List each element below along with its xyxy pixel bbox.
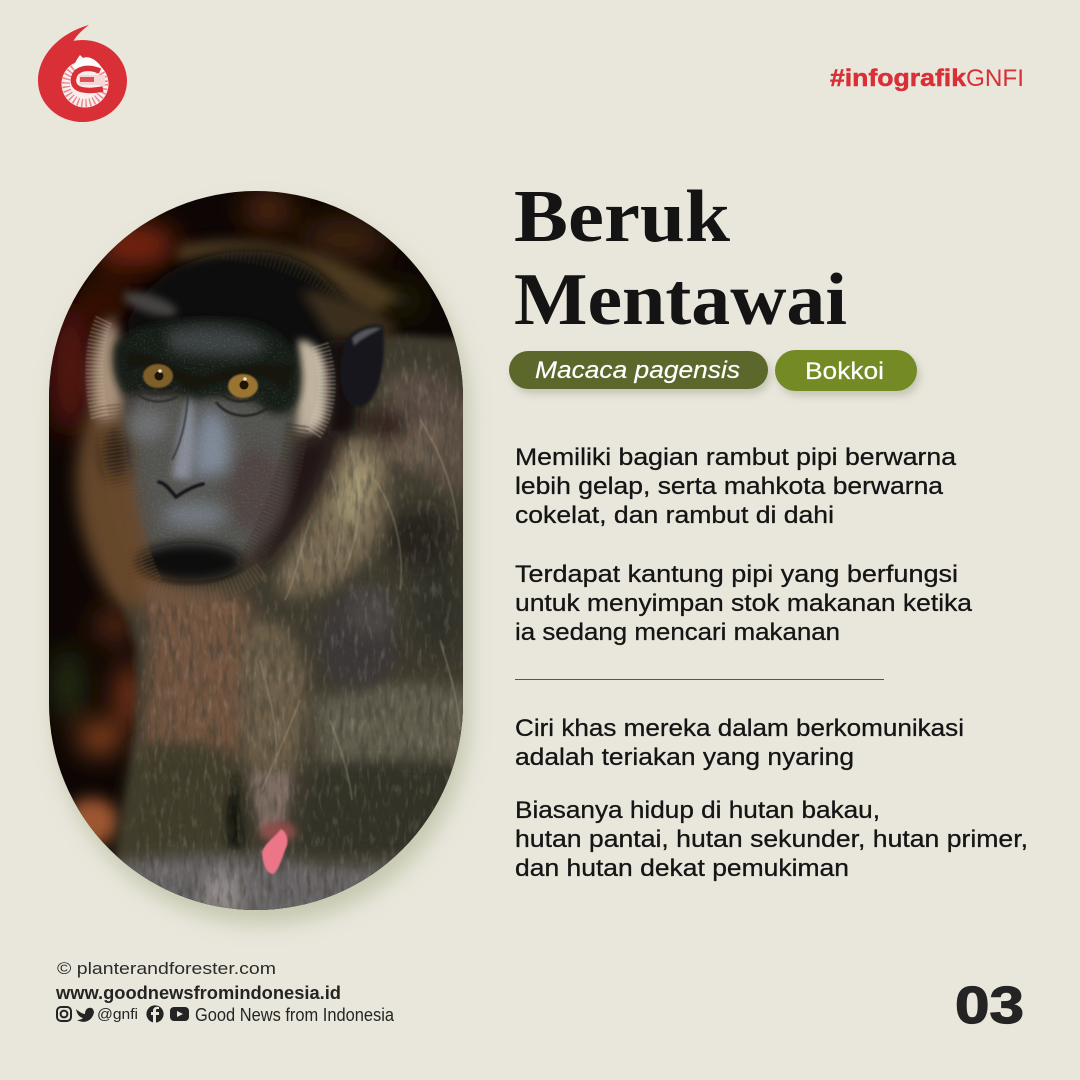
- brow shadow: [128, 352, 295, 392]
- right lower olive dark: [300, 762, 475, 860]
- logo: [38, 25, 127, 122]
- text block: appearance: [515, 444, 957, 529]
- bottom grey: [116, 846, 398, 910]
- text block: communication: [515, 715, 964, 771]
- eye mask: [113, 319, 301, 414]
- photo background foliage: [49, 191, 463, 910]
- title: [514, 176, 847, 341]
- neck shadow: [250, 430, 338, 565]
- text block: communication: Ciri khas mereka dalam berkomunikasi: [515, 715, 964, 742]
- chest brown: [138, 575, 250, 760]
- text block: habitat: [515, 797, 1028, 882]
- hashtag: #infografik: [830, 65, 967, 92]
- pill: local name: Bokkoi: [805, 358, 884, 385]
- page name: Good News from Indonesia: [195, 1005, 395, 1025]
- fur texture overlays: [132, 350, 462, 910]
- page number: 03: [955, 977, 1024, 1035]
- right cheek fur: [294, 340, 331, 435]
- nostrils: [159, 482, 203, 497]
- pink detail: [260, 822, 296, 874]
- shoulder fur: [385, 370, 470, 500]
- right eye: [228, 374, 258, 398]
- text block: appearance: lebih gelap, serta mahkota berwarna: [515, 473, 944, 500]
- text block: habitat: Biasanya hidup di hutan bakau,: [515, 797, 880, 824]
- pill: scientific name: Macaca pagensis: [535, 357, 740, 384]
- lower left olive: [115, 742, 240, 860]
- social row: [57, 1005, 395, 1025]
- center fur: [241, 620, 308, 775]
- title: Beruk: [514, 176, 731, 258]
- body fur: [76, 330, 480, 930]
- left eye: [143, 364, 173, 388]
- head crown and hair: [91, 240, 400, 565]
- loose hair strands: [260, 420, 460, 800]
- pill: local name: [775, 350, 920, 396]
- icon: instagram: [57, 1007, 71, 1021]
- skin: [124, 391, 294, 565]
- right lower tan: [315, 683, 475, 765]
- fringe fur around face: [94, 252, 345, 595]
- highlights: [193, 408, 231, 480]
- text block: communication: adalah teriakan yang nyaring: [515, 744, 854, 771]
- photo credit: © planterandforester.com: [57, 959, 276, 978]
- hashtag: GNFI: [966, 65, 1024, 92]
- ear shadow: [328, 340, 360, 440]
- text block: appearance: cokelat, dan rambut di dahi: [515, 502, 834, 529]
- website: www.goodnewsfromindonesia.id: [55, 983, 341, 1003]
- text block: appearance: Memiliki bagian rambut pipi berwarna: [515, 444, 957, 471]
- photo shadow: [55, 205, 469, 924]
- text block: cheek pouch: ia sedang mencari makanan: [515, 619, 840, 646]
- pill: scientific name: [509, 351, 771, 394]
- icon: twitter: [76, 1008, 94, 1022]
- text block: cheek pouch: untuk menyimpan stok makanan ketika: [515, 590, 973, 617]
- text block: cheek pouch: [515, 561, 973, 646]
- hashtag: [830, 65, 1024, 92]
- emblem: [62, 55, 108, 108]
- text block: habitat: dan hutan dekat pemukiman: [515, 855, 849, 882]
- photo: monkey portrait: [49, 191, 463, 910]
- tan fur streak: [280, 435, 389, 596]
- title: Mentawai: [514, 259, 847, 341]
- icon: youtube: [170, 1007, 189, 1021]
- skin grain: [122, 318, 298, 553]
- left cheek fur: [91, 316, 126, 425]
- face: [112, 318, 302, 581]
- ear: [340, 325, 384, 407]
- chin dark: [138, 543, 242, 581]
- nose bridge lines: [172, 395, 188, 460]
- left neck brown: [76, 410, 170, 609]
- wrinkled arm skin: [322, 608, 394, 692]
- text block: cheek pouch: Terdapat kantung pipi yang berfungsi: [515, 561, 958, 588]
- text block: habitat: hutan pantai, hutan sekunder, hutan primer,: [515, 826, 1028, 853]
- icon: facebook: [146, 1005, 164, 1023]
- handle: @gnfi: [97, 1006, 138, 1023]
